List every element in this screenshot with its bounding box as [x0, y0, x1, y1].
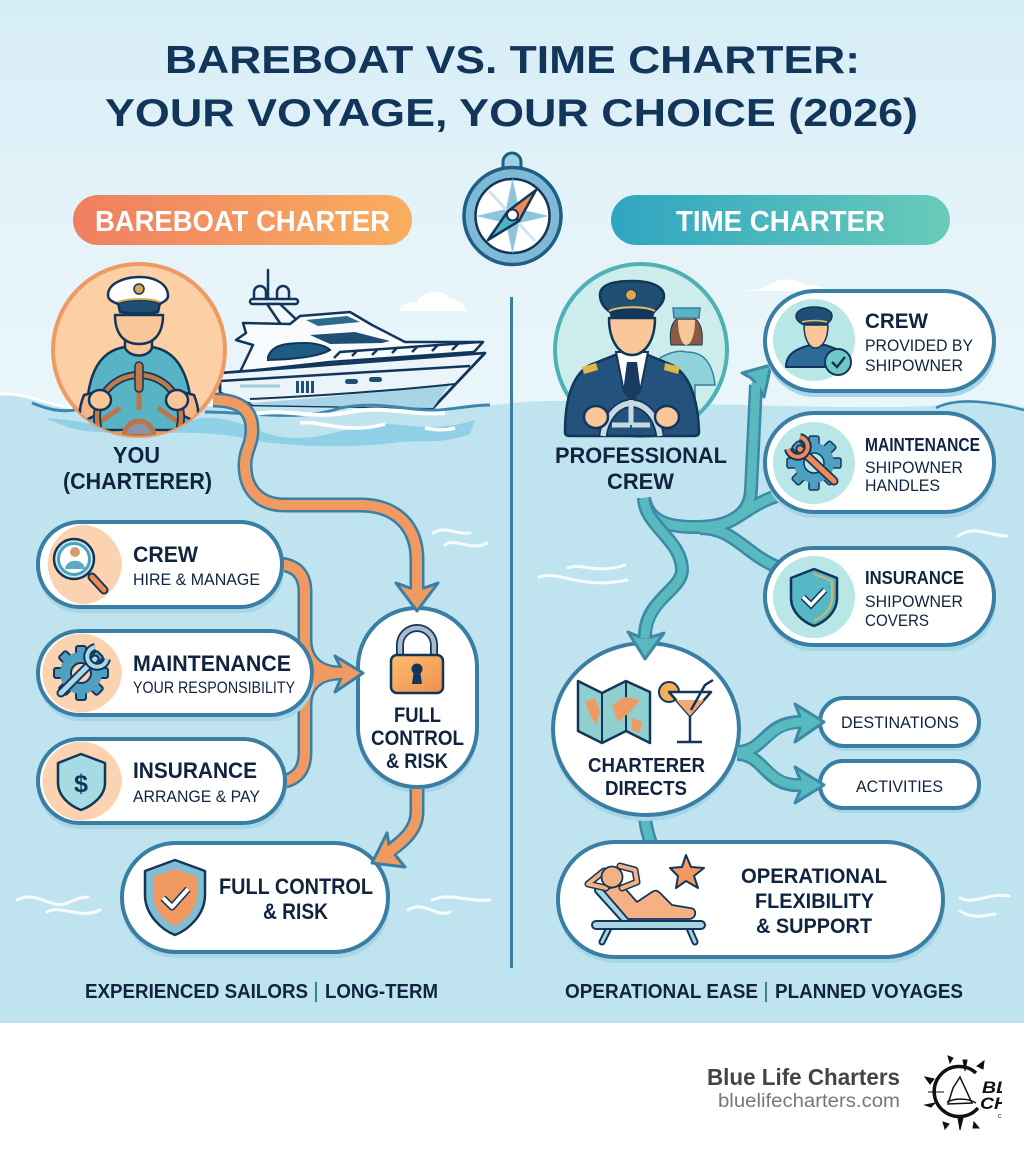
panel: operational flexibility and support: OPERATIONAL — [741, 864, 887, 888]
panel: full control outcome — [122, 843, 390, 958]
label: you (charterer): (CHARTERER) — [63, 468, 212, 494]
icon: officer with check badge — [786, 307, 851, 375]
panel: charterer directs — [552, 643, 740, 821]
panel: insurance (time charter): SHIPOWNER — [865, 592, 963, 611]
panel: maintenance (time charter) — [765, 413, 996, 518]
panel: insurance (bareboat) — [38, 739, 287, 829]
panel: full control outcome: FULL CONTROL — [219, 874, 373, 899]
panel: crew (bareboat) — [38, 522, 284, 613]
panel: crew (bareboat): HIRE & MANAGE — [133, 570, 260, 589]
label: professional crew: PROFESSIONAL — [555, 443, 727, 468]
panel: crew (time charter): PROVIDED BY — [865, 336, 973, 355]
title — [105, 39, 918, 135]
stewardess — [660, 308, 715, 436]
panel: operational flexibility and support — [558, 842, 945, 963]
panel: maintenance (time charter): HANDLES — [865, 476, 940, 495]
heading: time charter: TIME CHARTER — [676, 206, 885, 238]
heading: bareboat charter: BAREBOAT CHARTER — [95, 206, 390, 238]
caption: time charter audience: PLANNED VOYAGES — [775, 980, 963, 1003]
panel: full control outcome: & RISK — [263, 899, 328, 924]
title: BAREBOAT VS. TIME CHARTER: — [165, 39, 860, 82]
professional crew circle — [555, 264, 727, 436]
pill: destinations — [820, 698, 981, 751]
arrow: link from charterer circle to flexibility panel — [645, 812, 652, 846]
panel: insurance (time charter): COVERS — [865, 611, 929, 630]
label: professional crew — [555, 443, 727, 494]
pill: activities — [820, 761, 981, 813]
footer: logo — [925, 1056, 1009, 1130]
panel: full control lock: FULL — [394, 704, 441, 727]
icon: gear and wrench — [54, 646, 108, 700]
panel: crew (bareboat): CREW — [133, 542, 198, 567]
arrow: full control to outcome — [372, 789, 417, 867]
icon: padlock — [391, 628, 443, 693]
you circle: captain at the wheel — [53, 264, 225, 459]
illustration: yacht — [220, 270, 485, 408]
panel: charterer directs: CHARTERER — [588, 755, 706, 777]
icon: gear and wrench — [787, 436, 841, 490]
panel: insurance (time charter): INSURANCE — [865, 567, 964, 588]
panel: maintenance (bareboat) — [38, 631, 314, 721]
caption: time charter audience — [565, 980, 963, 1003]
cloud right — [735, 279, 830, 291]
label: professional crew: CREW — [607, 469, 675, 494]
footer: logo: c — [998, 1113, 1002, 1120]
panel: insurance (bareboat): ARRANGE & PAY — [133, 787, 260, 806]
icon: orange shield with check — [145, 860, 205, 935]
panel: full control lock: CONTROL — [371, 727, 464, 750]
arrow: crew branches right — [644, 365, 780, 568]
label: you (charterer): YOU — [113, 442, 160, 468]
heading: time charter — [611, 195, 950, 245]
panel: operational flexibility and support: & SUPPORT — [756, 914, 872, 938]
panel: full control lock — [358, 608, 478, 793]
panel: crew (time charter) — [765, 291, 996, 397]
cloud left — [399, 291, 467, 311]
footer: brand text: bluelifecharters.com — [718, 1091, 900, 1112]
panel: maintenance (time charter): MAINTENANCE — [865, 435, 980, 455]
icon: shield with dollar — [58, 754, 105, 810]
pill: destinations: DESTINATIONS — [841, 713, 959, 732]
icon: cocktail — [659, 680, 713, 742]
icon: shield with dollar: $ — [74, 770, 88, 798]
caption: time charter audience: OPERATIONAL EASE — [565, 980, 758, 1003]
footer: brand text: Blue Life Charters — [707, 1064, 900, 1090]
caption: bareboat audience: LONG-TERM — [325, 980, 438, 1003]
heading: bareboat charter — [73, 195, 412, 245]
panel: maintenance (bareboat): YOUR RESPONSIBILITY — [133, 678, 295, 697]
panel: maintenance (bareboat): MAINTENANCE — [133, 651, 291, 676]
arrows: charterer to destinations and activities — [737, 704, 824, 803]
label: you (charterer) — [63, 442, 212, 494]
captain — [565, 281, 699, 436]
icon: teal shield with check — [791, 569, 837, 626]
arrow: you to full control — [213, 400, 438, 611]
footer: logo: BL — [982, 1078, 1008, 1097]
panel: crew (time charter): CREW — [865, 310, 928, 333]
icon: lounger and star — [588, 855, 705, 942]
footer: logo: CH — [980, 1094, 1009, 1113]
footer: brand text — [707, 1064, 900, 1112]
pill: activities: ACTIVITIES — [856, 777, 943, 796]
arrow: crew down to charterer directs — [628, 498, 682, 659]
panel: full control lock: & RISK — [386, 750, 448, 773]
title: YOUR VOYAGE, YOUR CHOICE (2026) — [105, 92, 918, 135]
caption: bareboat audience — [85, 980, 438, 1003]
icon: compass — [464, 153, 561, 264]
panel: insurance (time charter) — [765, 548, 996, 651]
icon: map — [578, 681, 650, 743]
panel: crew (time charter): SHIPOWNER — [865, 356, 963, 375]
panel: maintenance (time charter): SHIPOWNER — [865, 458, 963, 477]
waves under yacht — [32, 403, 490, 446]
panel: operational flexibility and support: FLEXIBILITY — [755, 889, 874, 913]
arrow: left items merge into full control — [280, 564, 363, 782]
wavelets — [17, 401, 1024, 916]
caption: bareboat audience: EXPERIENCED SAILORS — [85, 980, 308, 1003]
icon: magnifier — [54, 539, 104, 590]
panel: charterer directs: DIRECTS — [605, 778, 687, 800]
panel: insurance (bareboat): INSURANCE — [133, 758, 257, 783]
